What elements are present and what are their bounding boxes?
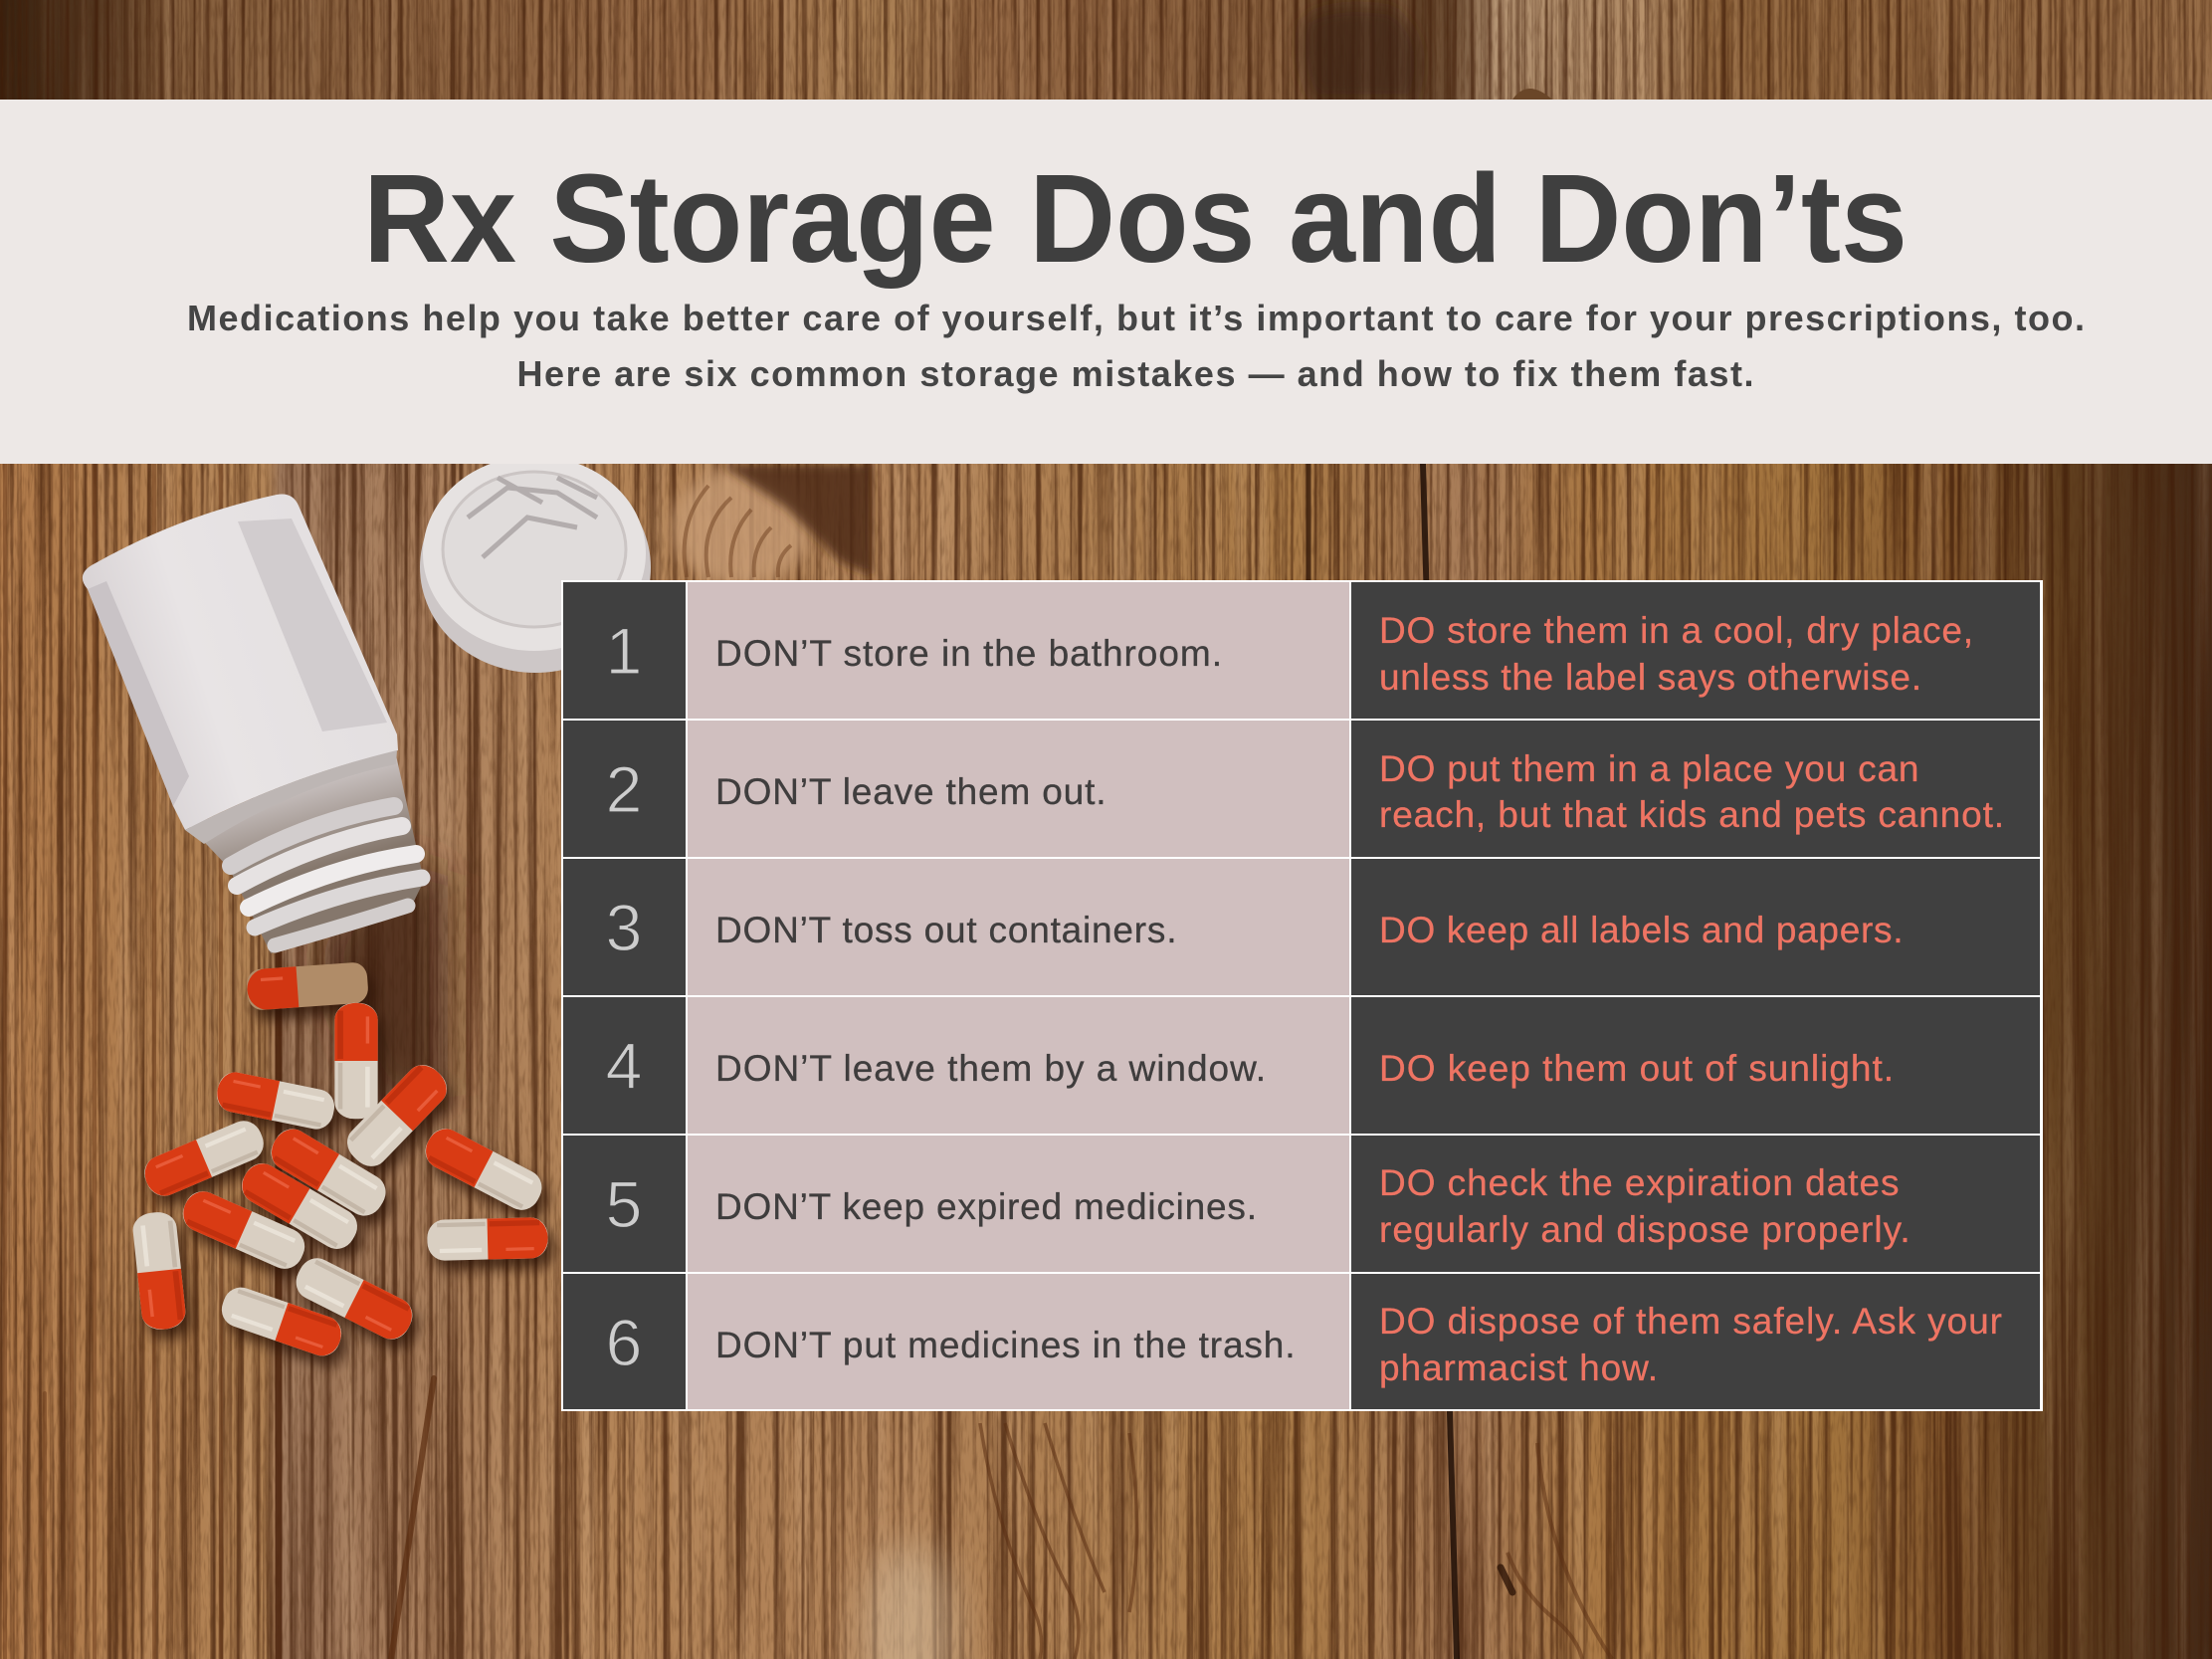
row 2: reach, but that kids and pets cannot. bbox=[1379, 794, 2004, 835]
row 1 bbox=[563, 582, 2040, 719]
bottle body bbox=[83, 494, 398, 830]
row 2: DON’T leave them out. bbox=[715, 771, 1106, 812]
row 3: DO keep all labels and papers. bbox=[1379, 910, 1903, 950]
row 1: DO store them in a cool, dry place, bbox=[1379, 610, 1973, 651]
bottle neck threads bbox=[189, 746, 424, 953]
icon: pill bottle bbox=[83, 494, 424, 953]
row 5: DO check the expiration dates bbox=[1379, 1162, 1899, 1203]
row 1: unless the label says otherwise. bbox=[1379, 657, 1921, 698]
row 3: DON’T toss out containers. bbox=[715, 910, 1176, 950]
row 3: 3 bbox=[606, 891, 642, 964]
wood seams and knots bbox=[5, 464, 1457, 1659]
bottle label panel bbox=[238, 518, 387, 731]
row 5: DON’T keep expired medicines. bbox=[715, 1186, 1257, 1227]
row 2: 2 bbox=[606, 752, 642, 826]
row 2: DO put them in a place you can bbox=[1379, 748, 1918, 789]
row 4 bbox=[563, 997, 2040, 1134]
subtitle line 2: Here are six common storage mistakes — and how to fix them fast. bbox=[517, 353, 1754, 394]
row 4: DO keep them out of sunlight. bbox=[1379, 1048, 1894, 1089]
title: Rx Storage Dos and Don’ts bbox=[363, 148, 1908, 289]
row 1: 1 bbox=[606, 614, 642, 688]
icon: bottle cap bbox=[420, 456, 651, 673]
row 4: DON’T leave them by a window. bbox=[715, 1048, 1266, 1089]
row 6 bbox=[563, 1274, 2040, 1409]
subtitle line 1: Medications help you take better care of yourself, but it’s important to care for your prescriptions, too. bbox=[187, 298, 2085, 338]
row 4: 4 bbox=[606, 1029, 642, 1103]
row 5: 5 bbox=[606, 1167, 642, 1241]
lower wood cathedral grain bbox=[863, 1423, 1612, 1659]
row 6: DON’T put medicines in the trash. bbox=[715, 1325, 1296, 1365]
bottle shadow bbox=[318, 856, 448, 1105]
row 1: DON’T store in the bathroom. bbox=[715, 633, 1222, 674]
top strip knot bbox=[1301, 7, 1552, 100]
banner bbox=[0, 100, 2212, 464]
row 6: 6 bbox=[606, 1306, 642, 1379]
row 3 bbox=[563, 859, 2040, 995]
bottle side shading bbox=[88, 581, 189, 806]
row 6: DO dispose of them safely. Ask your bbox=[1379, 1301, 2002, 1342]
row 6: pharmacist how. bbox=[1379, 1348, 1658, 1388]
knot above the table bbox=[672, 464, 872, 587]
table bbox=[561, 580, 2043, 1411]
row 5: regularly and dispose properly. bbox=[1379, 1209, 1910, 1250]
icon: spilled capsules bbox=[131, 961, 548, 1360]
row 5 bbox=[563, 1136, 2040, 1272]
row 2 bbox=[563, 721, 2040, 857]
